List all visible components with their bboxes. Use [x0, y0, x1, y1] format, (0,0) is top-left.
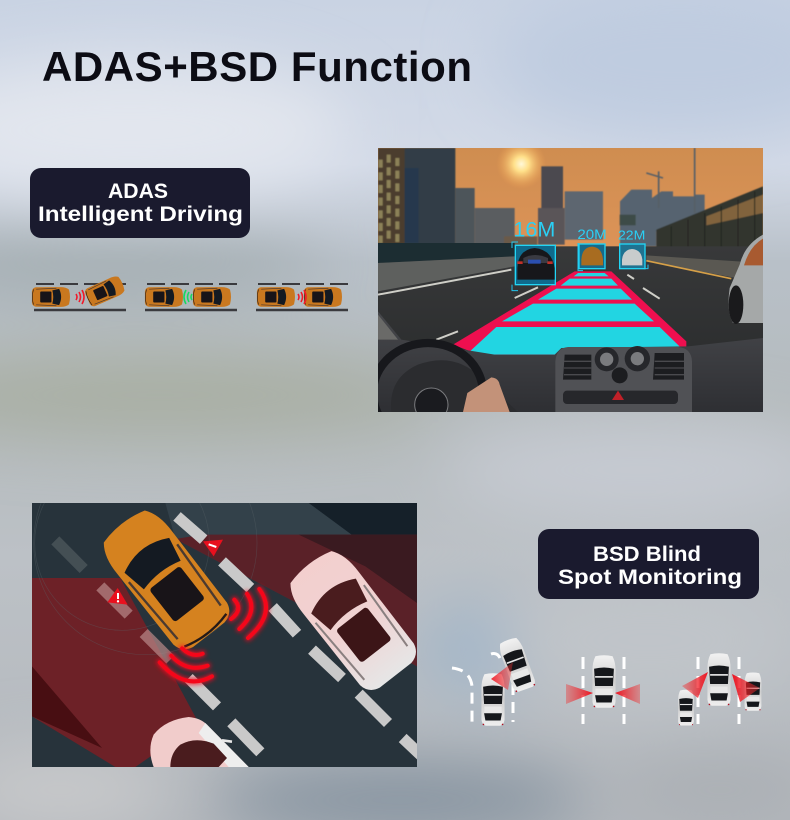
- red radar arcs: [160, 589, 266, 681]
- sun: [496, 139, 546, 189]
- distance labels: 16M: [513, 218, 555, 242]
- label: BSD Blind Spot Monitoring: Spot Monitoring: [558, 566, 742, 589]
- pink car bottom: [150, 717, 249, 767]
- BSD icon: rear cross traffic zones: [678, 653, 761, 726]
- label: BSD Blind Spot Monitoring: BSD Blind: [593, 543, 701, 566]
- label: ADAS Intelligent Driving: Intelligent Driving: [38, 203, 243, 226]
- city skyline: [378, 148, 763, 263]
- ADAS icon: lane departure warning: [32, 274, 126, 310]
- sensor radar beams: [32, 431, 417, 767]
- distance labels: [513, 218, 645, 242]
- panel: BSD blind spot illustration: [32, 503, 417, 767]
- pink car right: [281, 543, 423, 697]
- BSD icon: lane change assist: [452, 636, 537, 726]
- car on the right: [729, 235, 763, 323]
- label: BSD Blind Spot Monitoring: [538, 529, 759, 599]
- detected cars: [512, 242, 648, 291]
- dashboard vents and dials: [563, 346, 684, 404]
- lane overlay: [453, 271, 686, 365]
- distance labels: 20M: [577, 227, 607, 242]
- label: ADAS Intelligent Driving: ADAS: [108, 180, 168, 203]
- distance labels: 22M: [618, 227, 645, 242]
- steering wheel and hand: [373, 343, 518, 443]
- panel: ADAS road photo illustration: [378, 148, 763, 412]
- ADAS icon: forward collision warning: [256, 284, 348, 310]
- road and barriers: [378, 246, 763, 412]
- ADAS icon: safe following distance: [145, 284, 237, 310]
- title: ADAS+BSD Function: [42, 43, 472, 90]
- warning triangles: [107, 540, 223, 605]
- lane dashes: [55, 516, 422, 756]
- orange car: [95, 502, 236, 656]
- BSD icon: side blind spot zones: [566, 655, 640, 724]
- dashboard: [378, 311, 763, 412]
- label: ADAS Intelligent Driving: [30, 168, 250, 238]
